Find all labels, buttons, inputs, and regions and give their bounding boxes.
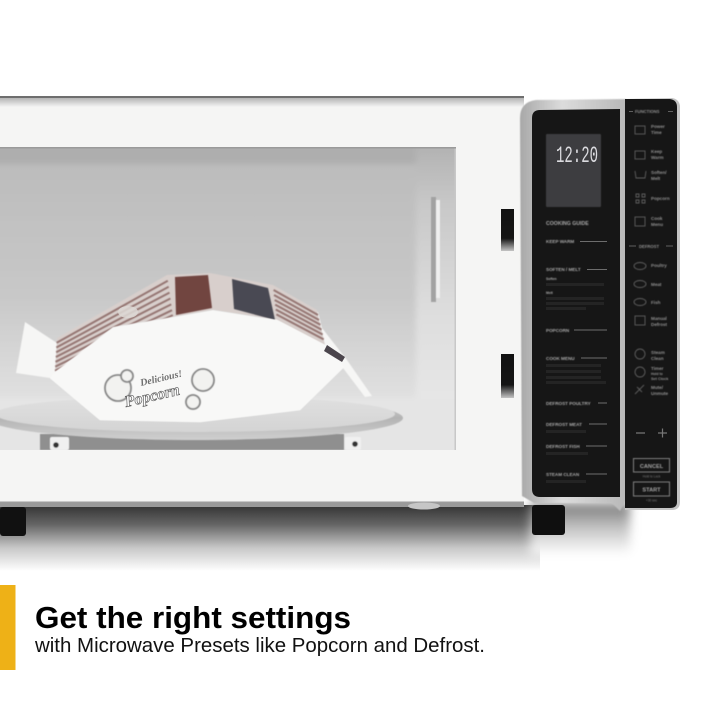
- guide labels: [546, 221, 591, 477]
- bottom edge: [0, 502, 524, 510]
- foot right: [532, 505, 565, 535]
- function labels: Soften/: [651, 170, 667, 175]
- subheading: with Microwave Presets like Popcorn and Defrost.: [34, 634, 485, 657]
- popcorn logo: [105, 369, 214, 411]
- guide labels: DEFROST FISH: [546, 444, 580, 449]
- function labels: Timer: [651, 366, 664, 371]
- top edge: [0, 96, 524, 107]
- silver bezel: [520, 99, 626, 511]
- start button: START: [642, 488, 661, 494]
- function labels: Steam: [651, 350, 665, 355]
- function labels: Menu: [651, 222, 663, 227]
- clock display: [546, 134, 601, 207]
- minus and plus buttons: [636, 428, 667, 438]
- function labels: Fish: [651, 300, 661, 305]
- printed letters: [175, 275, 275, 320]
- start button: [634, 482, 670, 502]
- function labels: Time: [651, 130, 662, 135]
- guide labels: Melt: [546, 291, 554, 295]
- bag lower panel: [50, 310, 344, 422]
- cancel button: Hold to Lock: [643, 474, 661, 478]
- door vent: [431, 197, 440, 302]
- guide labels: POPCORN: [546, 328, 570, 333]
- start button: +30 sec: [646, 498, 658, 502]
- function labels: Warm: [651, 155, 664, 160]
- function labels: Manual: [651, 316, 667, 321]
- turntable: [0, 396, 403, 450]
- guide labels: STEAM CLEAN: [546, 472, 580, 477]
- popcorn print icon: [118, 306, 138, 318]
- function icons: [634, 126, 646, 394]
- function labels: Cook: [651, 216, 663, 221]
- function labels: Power: [651, 124, 665, 129]
- heading: Get the right settings: [35, 600, 351, 635]
- function labels: Hold to: [651, 372, 663, 376]
- function labels: Unmute: [651, 391, 669, 396]
- printed stripes: [55, 281, 324, 371]
- function labels: Keep: [651, 149, 662, 154]
- popcorn logo: Popcorn: [122, 382, 182, 411]
- guide labels: KEEP WARM: [546, 239, 574, 244]
- shadow under microwave: [0, 503, 630, 571]
- guide labels: SOFTEN / MELT: [546, 267, 581, 272]
- yellow accent bar: [0, 585, 16, 670]
- cancel button: [634, 458, 670, 478]
- guide labels: DEFROST POULTRY: [546, 401, 591, 406]
- popcorn logo: Delicious!: [138, 369, 183, 389]
- function labels: Mute/: [651, 385, 664, 390]
- function labels: Melt: [651, 176, 661, 181]
- cavity: [0, 140, 470, 460]
- function labels: Set Clock: [651, 377, 669, 381]
- function labels: Popcorn: [651, 196, 670, 201]
- function labels: DEFROST: [639, 244, 659, 249]
- function labels: Poultry: [651, 263, 667, 268]
- guide labels: COOKING GUIDE: [546, 221, 589, 227]
- function labels: Meat: [651, 282, 662, 287]
- microwave body: [0, 96, 626, 536]
- popcorn bag: [16, 273, 372, 422]
- foot left: [0, 507, 26, 536]
- door latch slots: [501, 209, 514, 398]
- panel: cooking guide: [532, 109, 620, 497]
- guide labels: COOK MENU: [546, 356, 575, 361]
- function labels: [635, 109, 670, 396]
- guide labels: DEFROST MEAT: [546, 422, 582, 427]
- function labels: Clean: [651, 356, 664, 361]
- front frame: [0, 98, 524, 504]
- cancel button: CANCEL: [640, 464, 664, 470]
- function labels: FUNCTIONS: [635, 109, 660, 114]
- function labels: Defrost: [651, 322, 668, 327]
- panel: functions: [625, 98, 680, 510]
- clock display: 12:20: [556, 143, 598, 169]
- guide labels: Soften: [546, 277, 557, 281]
